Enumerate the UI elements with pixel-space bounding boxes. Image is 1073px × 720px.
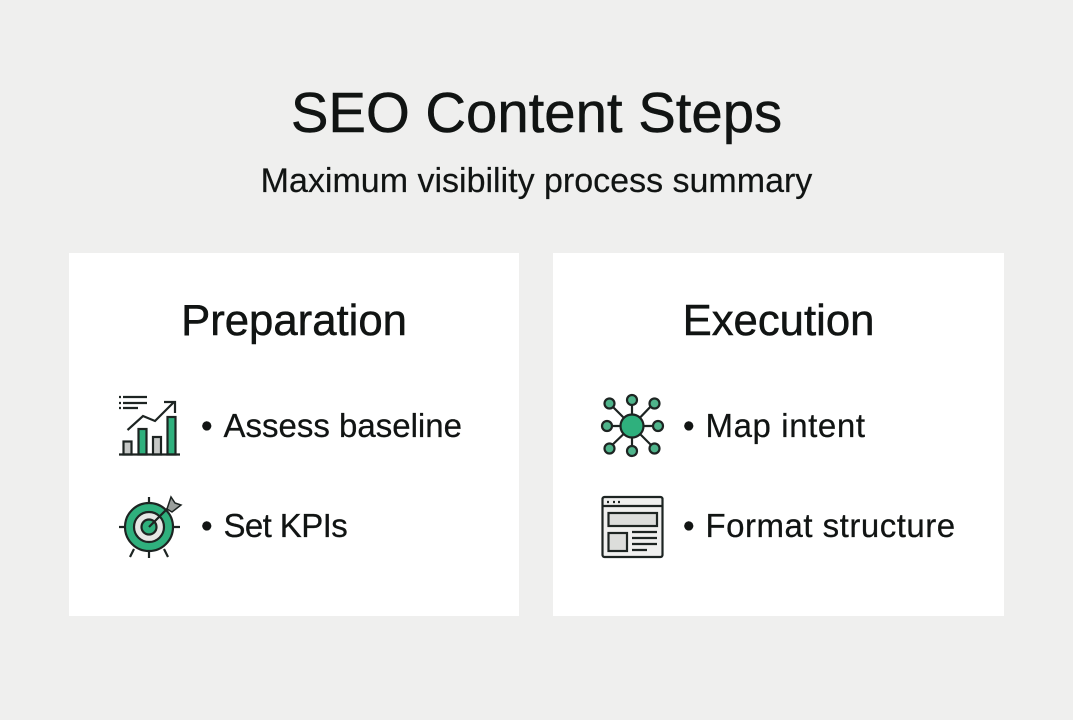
panel: execution — [553, 253, 1004, 616]
heading: execution: Execution — [683, 296, 874, 345]
text: assess baseline: Assess baseline — [224, 407, 462, 444]
text: map intent: • — [683, 407, 695, 444]
heading: preparation: Preparation — [181, 296, 407, 345]
text: format structure: Format structure — [706, 507, 956, 544]
text: set KPIs: • — [201, 507, 213, 544]
icon: network hub — [602, 395, 663, 456]
text: format structure: • — [683, 507, 695, 544]
icon: bar chart with rising arrow — [119, 397, 180, 454]
icon: web page layout — [602, 497, 662, 557]
text: assess baseline: • — [201, 407, 213, 444]
icon: target with arrow — [119, 497, 181, 558]
text: map intent: Map intent — [706, 407, 866, 444]
text: set KPIs: Set KPIs — [224, 507, 347, 544]
subtitle: Maximum visibility process summary — [261, 162, 812, 200]
title: SEO Content Steps — [291, 81, 782, 144]
panel: preparation — [69, 253, 519, 616]
